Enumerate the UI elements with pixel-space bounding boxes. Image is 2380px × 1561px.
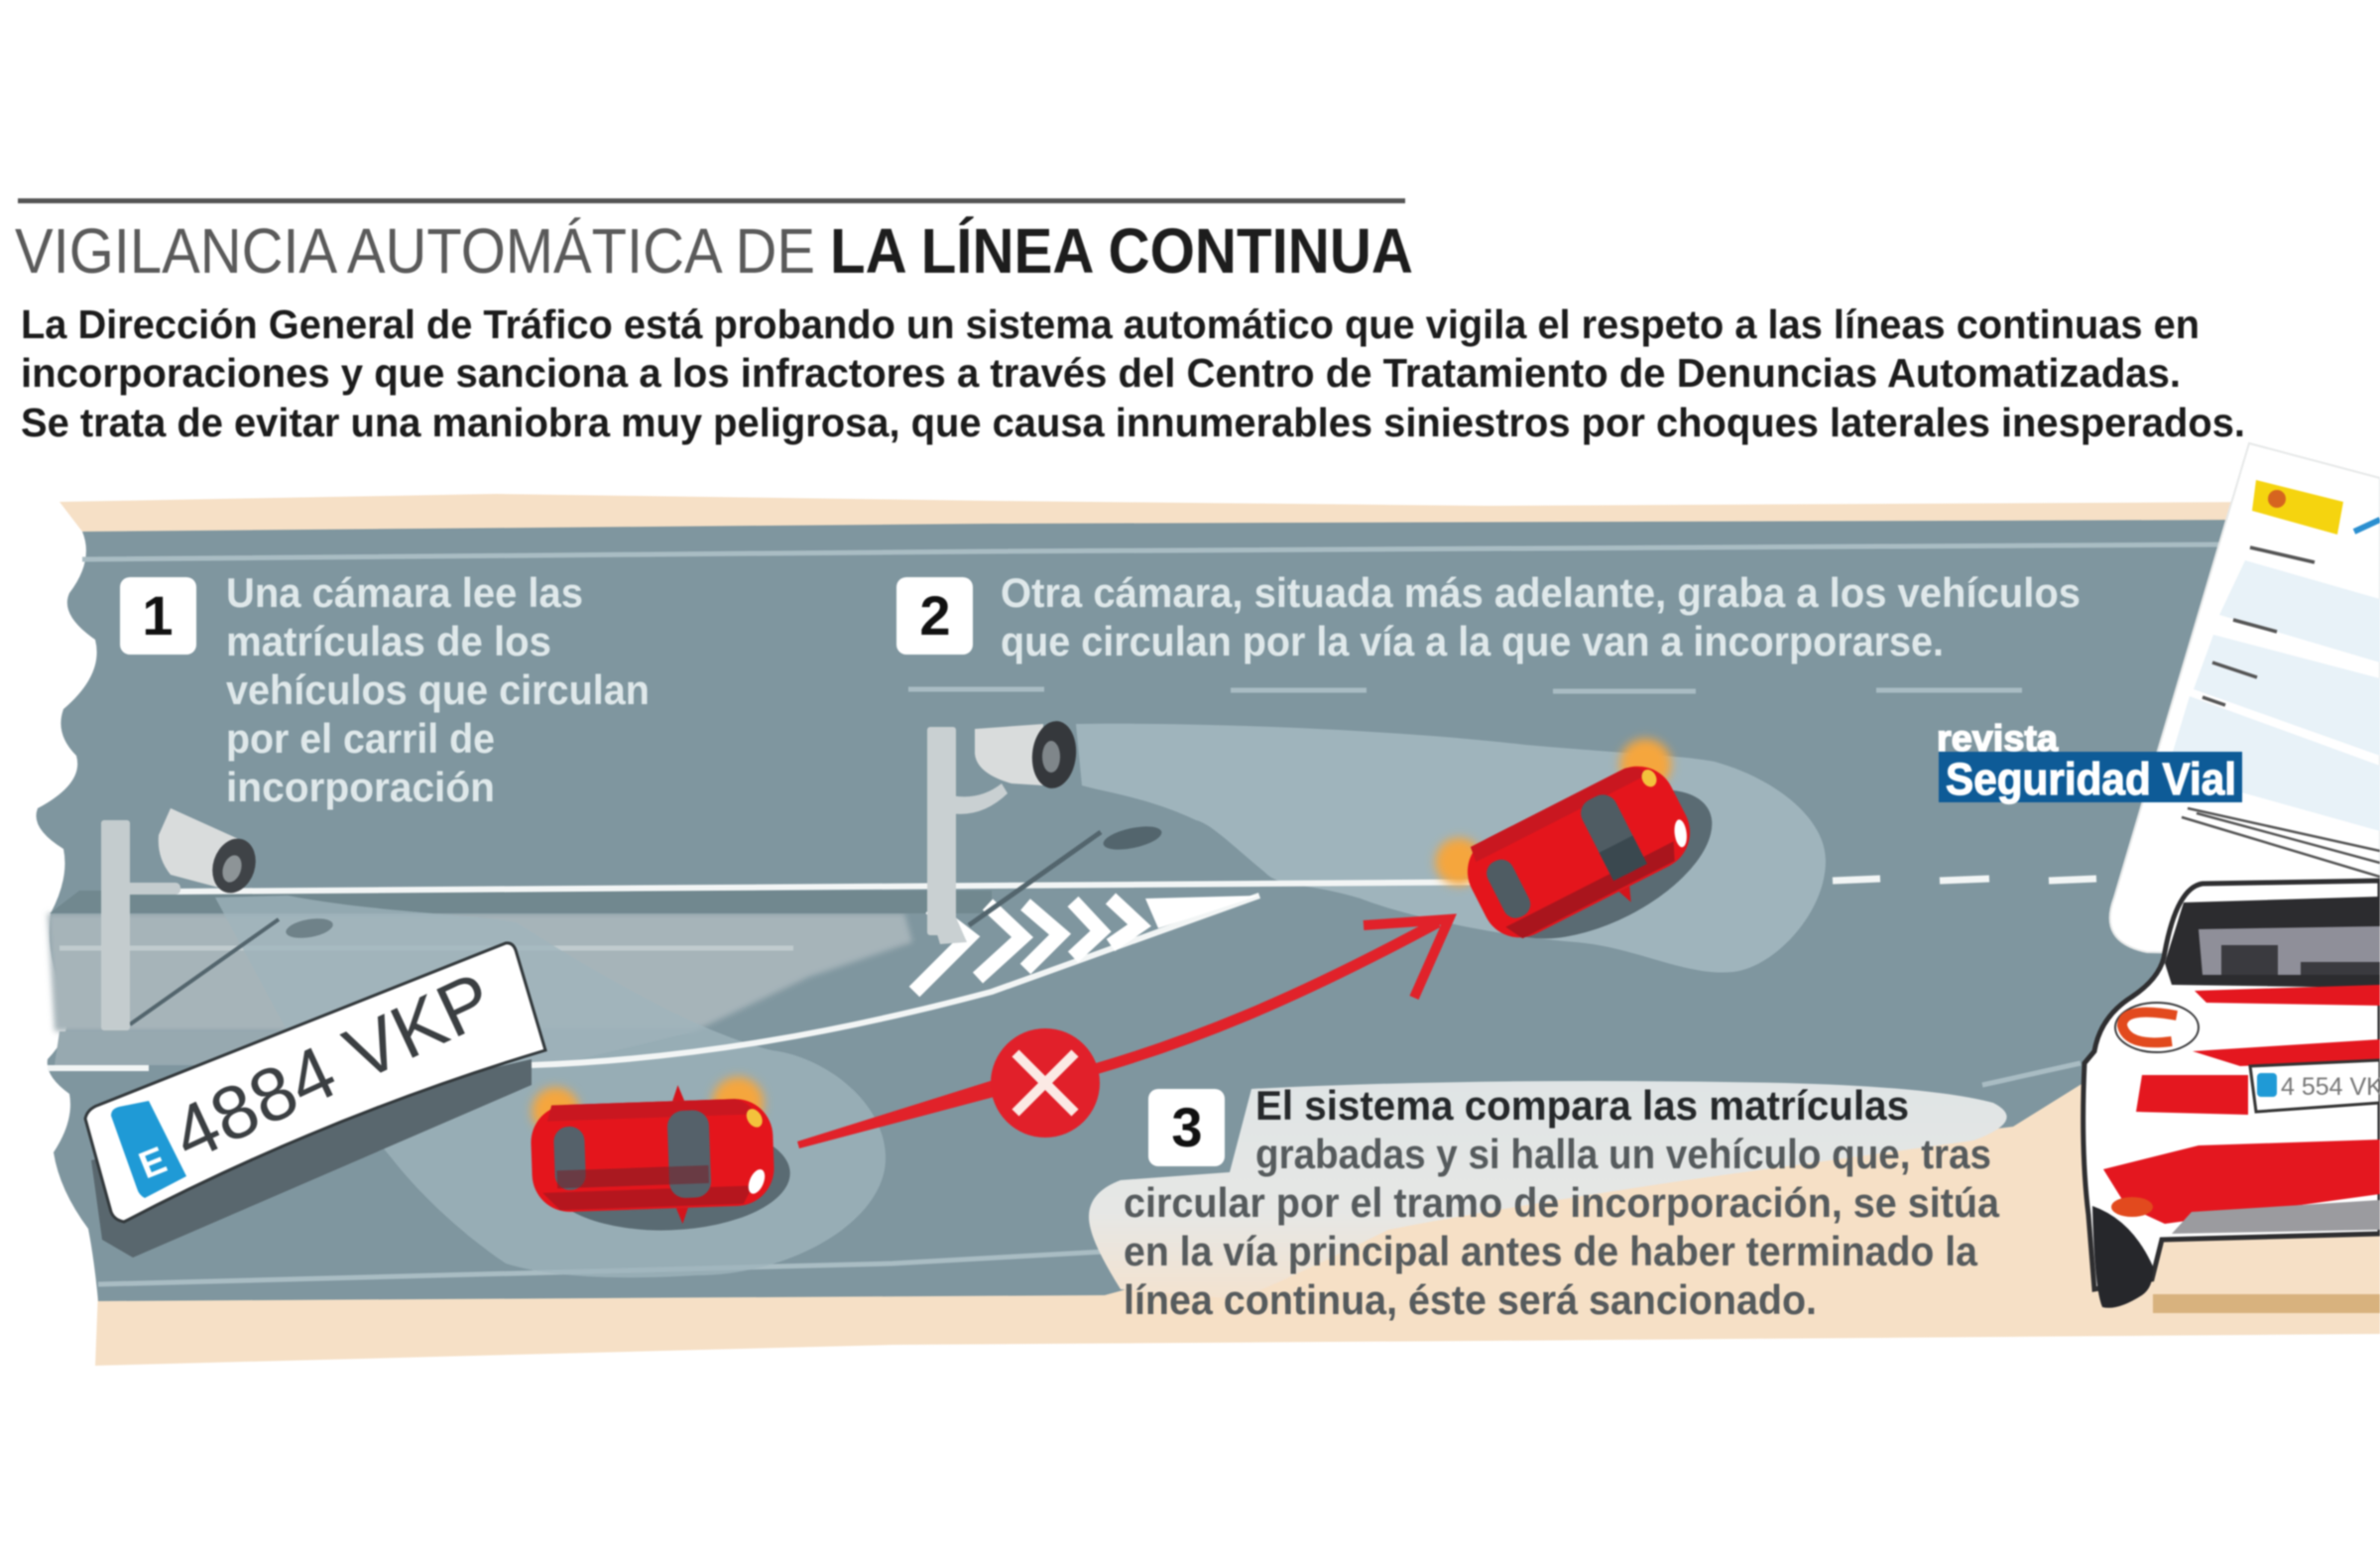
number badge 1	[120, 577, 196, 655]
rear view car	[2083, 881, 2380, 1313]
rear wheel	[2092, 1206, 2153, 1308]
logo: revista Seguridad Vial	[1937, 718, 2242, 804]
main solid line and dashes	[48, 879, 2096, 1068]
prohibition circle	[991, 1028, 1100, 1138]
plate blue badge	[111, 1101, 186, 1198]
camera 1 beam and car halo	[215, 896, 886, 1277]
number badge 2	[896, 577, 973, 655]
step 1	[120, 569, 650, 810]
sand background	[60, 494, 2380, 1366]
step 3 text	[1124, 1082, 2000, 1323]
tail light	[2115, 1003, 2199, 1052]
rear window	[2165, 897, 2380, 988]
camera 2	[927, 719, 1079, 944]
red arrow with prohibition mark	[797, 919, 1449, 1148]
number badge 3	[1148, 1089, 1225, 1166]
ground shadow	[2153, 1294, 2380, 1313]
step 1 text: vehículos que circulan	[226, 666, 650, 713]
road edge lines and dashes	[82, 544, 2231, 1284]
intro paragraph	[21, 301, 2245, 445]
camera 2 beam	[1076, 724, 1826, 973]
step 3 text: línea continua, éste será sancionado.	[1124, 1276, 1817, 1323]
car 2	[1425, 725, 1734, 984]
step 1 text	[226, 569, 650, 810]
header: title and rule	[15, 198, 1413, 287]
rear licence plate: 4 554 VK	[2281, 1073, 2380, 1101]
plate blue badge: E	[134, 1140, 173, 1187]
licence plate	[85, 943, 545, 1258]
step 1 text: Una cámara lee las	[226, 569, 583, 616]
step 2 text	[1001, 569, 2081, 664]
road surface	[36, 520, 2281, 1301]
flag	[2252, 480, 2343, 535]
car 1	[529, 1075, 792, 1235]
red body stripes	[2103, 985, 2380, 1224]
step 3 text: circular por el tramo de incorporación, se sitúa	[1124, 1179, 2000, 1226]
reflector	[2111, 1197, 2153, 1217]
camera 1	[101, 808, 263, 1030]
step 1 text: matrículas de los	[226, 618, 551, 664]
lamp shadows	[130, 822, 1163, 1024]
lower bumper	[2172, 1200, 2380, 1234]
gore chevrons	[914, 896, 1259, 992]
form rows	[2167, 560, 2380, 831]
title: light part: VIGILANCIA AUTOMÁTICA DE	[15, 215, 815, 287]
step 3 text: en la vía principal antes de haber terminado la	[1124, 1228, 1978, 1274]
step 2 text: que circulan por la vía a la que van a incorporarse.	[1001, 618, 1944, 664]
step 3	[1089, 1081, 2007, 1323]
logo: revista Seguridad Vial: revista	[1937, 718, 2058, 759]
title: bold part: LA LÍNEA CONTINUA	[830, 215, 1413, 287]
intro paragraph: Se trata de evitar una maniobra muy peligrosa, que causa innumerables siniestros por choques laterales inesperados.	[21, 400, 2245, 445]
plate number: 4884 VKP	[160, 957, 506, 1177]
merge lane shading	[48, 913, 912, 1031]
number badge 2: 2	[919, 584, 951, 647]
step 1 text: por el carril de	[226, 715, 495, 762]
step 3 text: El sistema compara las matrículas	[1255, 1082, 1909, 1129]
intro paragraph: La Dirección General de Tráfico está probando un sistema automático que vigila el respeto a las líneas continuas en	[21, 301, 2200, 347]
step 1 text: incorporación	[226, 764, 495, 810]
logo: revista Seguridad Vial: Seguridad Vial	[1946, 754, 2236, 804]
step 3 text: grabadas y si halla un vehículo que, tras	[1255, 1131, 1991, 1177]
rear licence plate	[2250, 1060, 2380, 1112]
step 2	[896, 569, 2081, 664]
step 2 text: Otra cámara, situada más adelante, graba a los vehículos	[1001, 569, 2081, 616]
number badge 1: 1	[142, 584, 174, 647]
road illustration panel	[36, 494, 2380, 1366]
car body	[2083, 881, 2380, 1289]
document ink lines	[2182, 520, 2380, 877]
document: penalty notice	[2110, 443, 2380, 957]
text backing blob	[1089, 1081, 2007, 1299]
intro paragraph: incorporaciones y que sanciona a los infractores a través del Centro de Tratamiento de Denuncias Automatizadas.	[21, 350, 2181, 396]
number badge 3: 3	[1171, 1096, 1203, 1158]
